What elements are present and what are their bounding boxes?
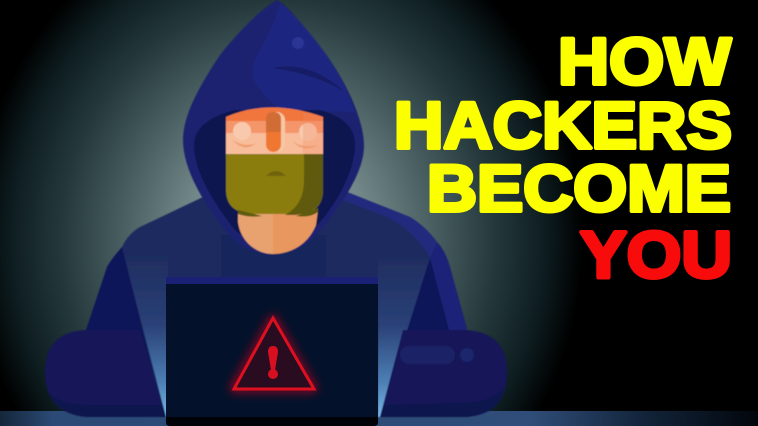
line: YOU: YOU [580, 218, 732, 292]
laptop base [166, 417, 378, 426]
neck shade [273, 210, 318, 254]
headline [394, 24, 732, 292]
forehead [226, 108, 323, 154]
beard shade [285, 154, 323, 215]
left arm lower shade [49, 392, 166, 417]
hood fold crease [272, 66, 345, 92]
forehead band 2 [226, 121, 323, 133]
forehead band [226, 108, 323, 121]
face right shade [303, 112, 323, 154]
figure: hacker [45, 0, 507, 417]
torso lower light right [378, 258, 430, 417]
right arm lower shade [380, 388, 504, 417]
right arm [380, 330, 507, 417]
warning triangle glow [233, 318, 314, 389]
exclamation mark [268, 346, 278, 379]
laptop lid edge [166, 277, 378, 285]
watch button [460, 348, 474, 362]
right shoulder highlight [342, 192, 437, 258]
hoodie torso [86, 192, 470, 417]
hood fold [252, 3, 355, 112]
right sleeve bright strip [430, 242, 467, 330]
line: HOW: HOW [558, 24, 732, 98]
left arm [45, 330, 166, 417]
moustache tips [238, 208, 318, 217]
right sleeve shadow [385, 258, 452, 400]
inner shirt [221, 235, 326, 280]
neck [238, 210, 273, 254]
laptop [166, 277, 378, 426]
line: BECOME: BECOME [427, 151, 731, 225]
mouth [266, 171, 286, 176]
warning triangle [234, 318, 314, 389]
table [0, 411, 758, 426]
hood spot [292, 37, 304, 49]
beard mask [226, 154, 323, 214]
hood opening shadow [194, 110, 355, 242]
left eye [232, 122, 256, 147]
left sleeve [86, 247, 160, 400]
laptop screen [166, 284, 378, 417]
torso lower light left [122, 247, 168, 417]
watch band [400, 346, 455, 364]
hood [183, 0, 364, 254]
right eye [292, 123, 318, 148]
line: HACKERS: HACKERS [394, 88, 732, 162]
nose [266, 112, 285, 152]
